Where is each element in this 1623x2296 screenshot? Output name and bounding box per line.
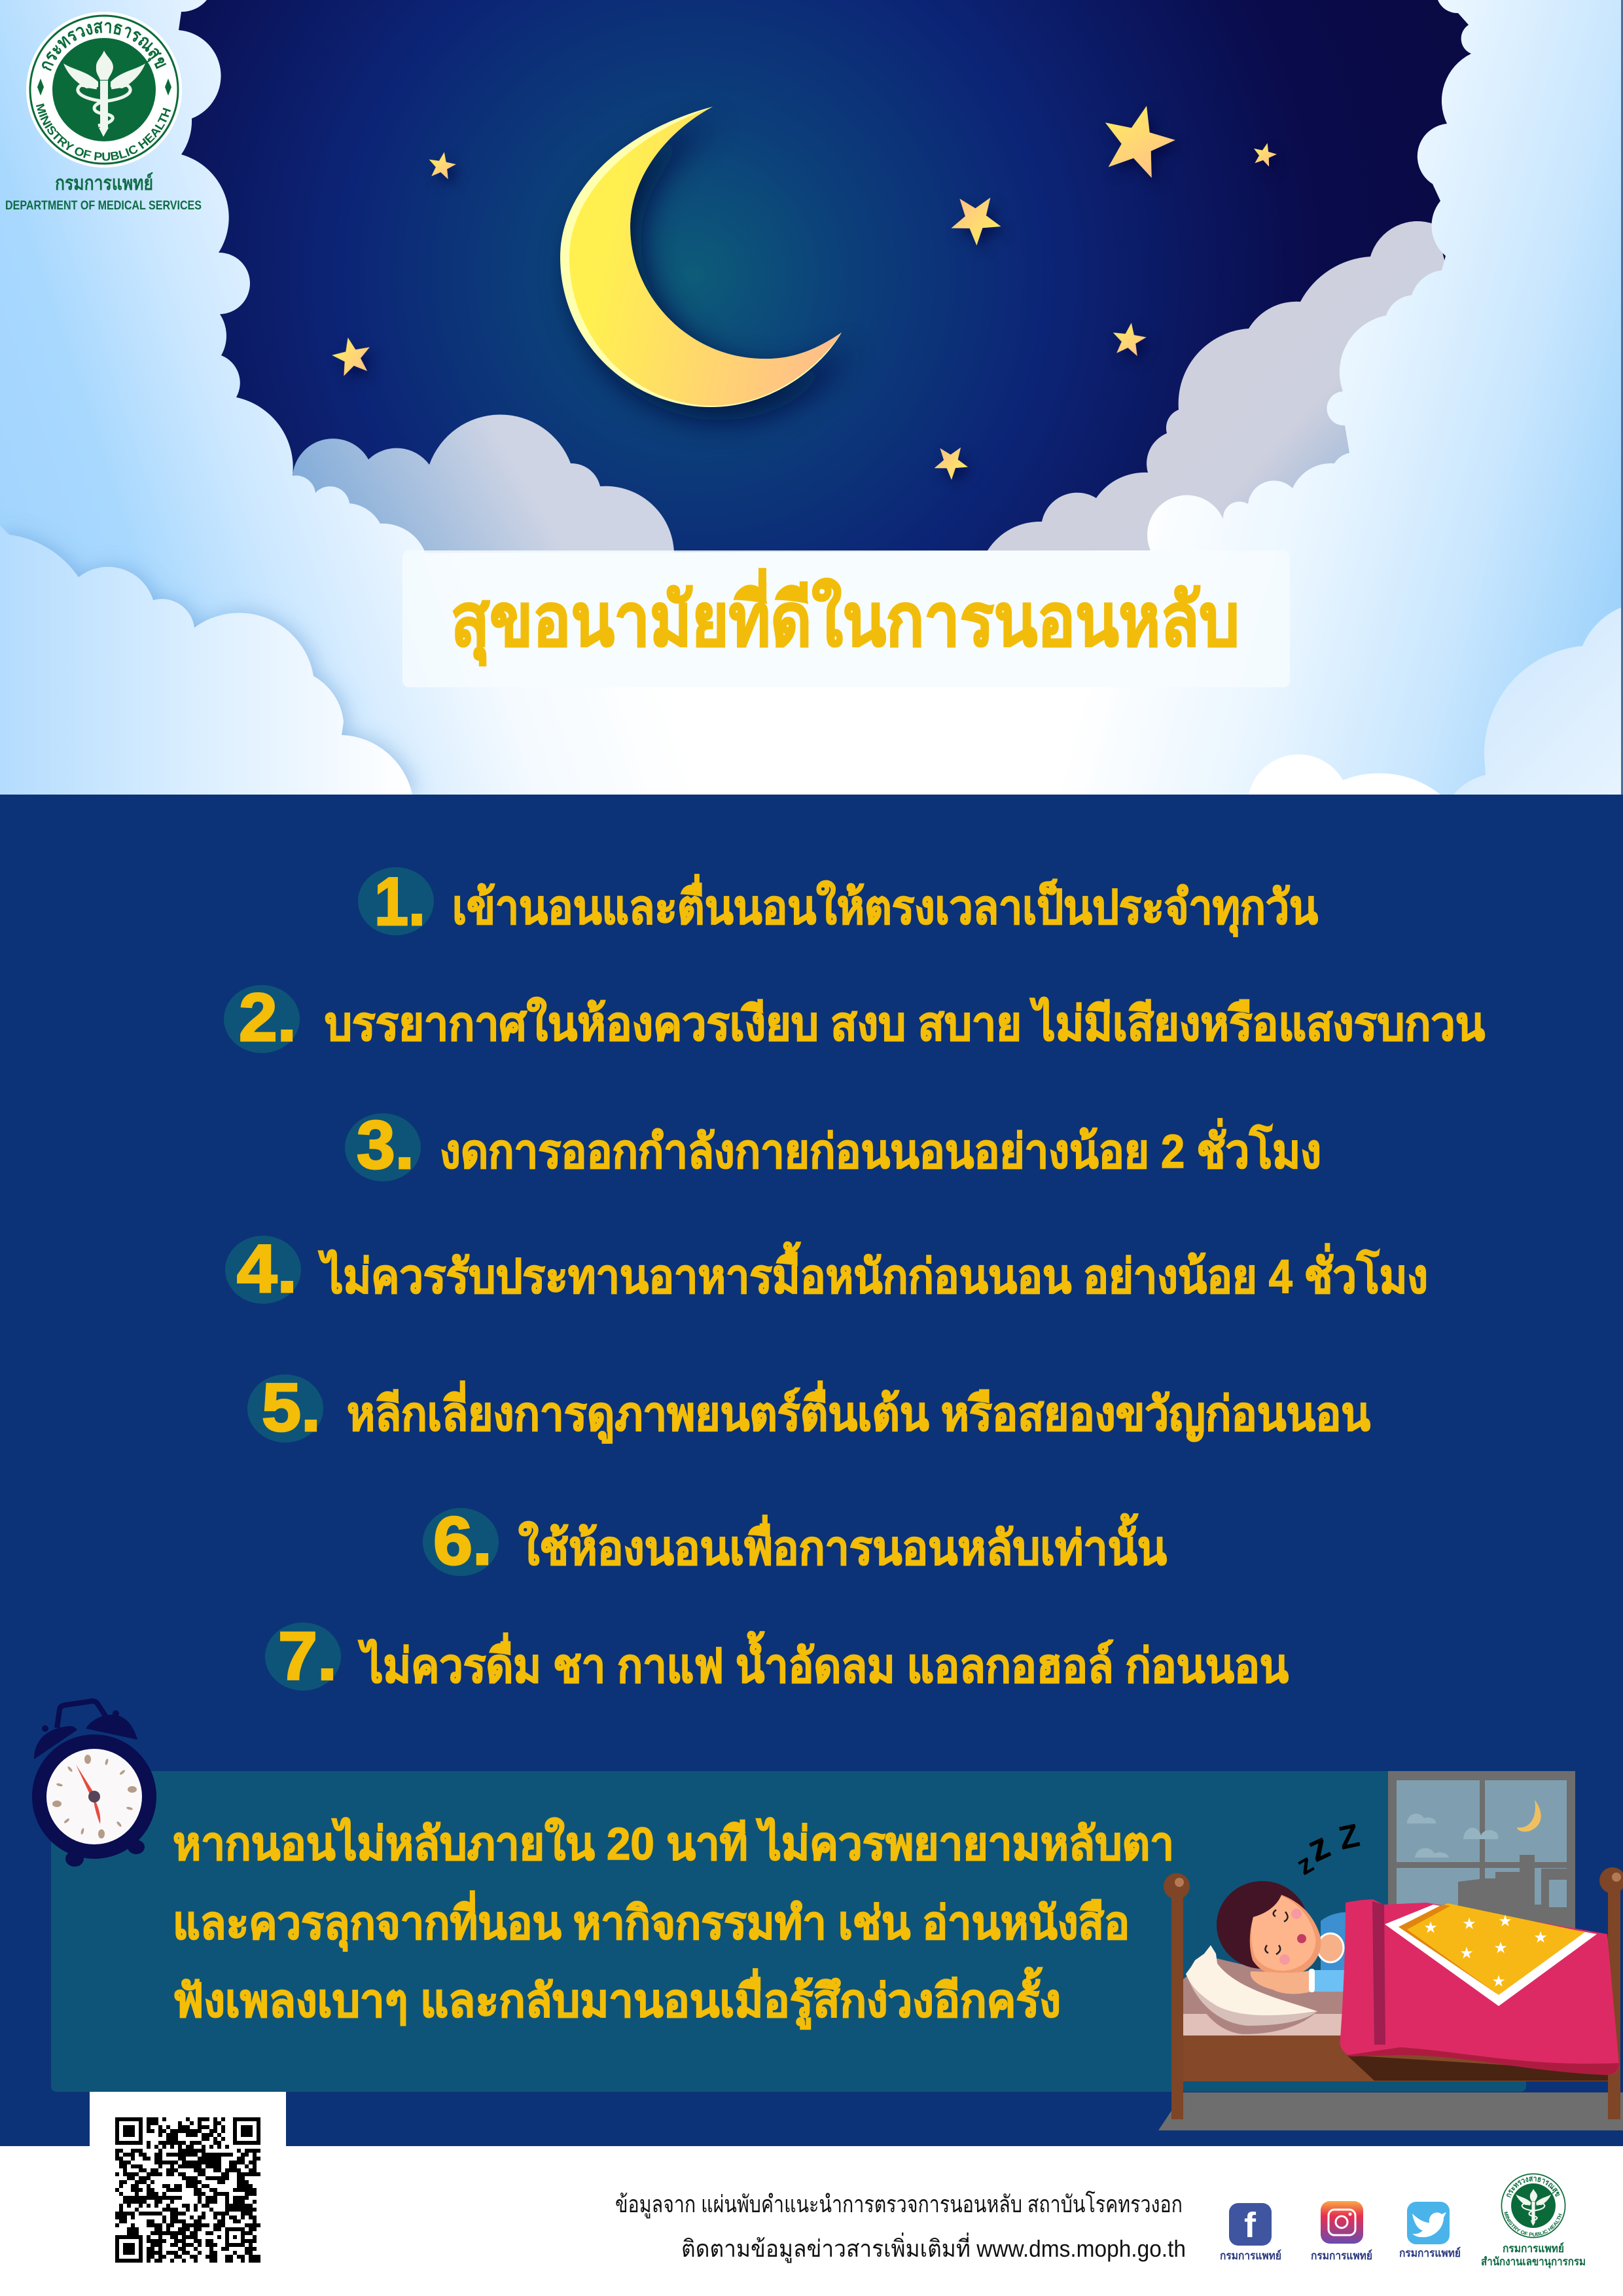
- blanket fold: [1385, 1905, 1597, 2006]
- icon: twitter: [1399, 2202, 1461, 2259]
- item 5: 5.: [262, 1370, 321, 1446]
- item 6: ใช้ห้องนอนเพื่อการนอนหลับเท่านั้น: [518, 1513, 1167, 1575]
- illustration: sleeping child in bed: ★: [1498, 1912, 1512, 1930]
- zzz: Z: [1336, 1817, 1363, 1857]
- item 3: 3.: [357, 1107, 414, 1183]
- item 6: [423, 1503, 1167, 1579]
- item 2: 2.: [239, 980, 296, 1056]
- cloud: left upper: [0, 0, 720, 795]
- illustration: sleeping child in bed: ★: [1423, 1918, 1438, 1937]
- panel: advice note: ฟังเพลงเบาๆ และกลับมานอนเมื่อรู้สึกง่วงอีกครั้ง: [173, 1967, 1061, 2030]
- item 6: 6.: [433, 1503, 492, 1579]
- panel: advice note: และควรลุกจากที่นอน หากิจกรรมทำ เช่น อ่านหนังสือ: [173, 1890, 1130, 1952]
- zzz: z: [1291, 1848, 1319, 1881]
- item 1: เข้านอนและตื่นนอนให้ตรงเวลาเป็นประจำทุกวัน: [452, 874, 1318, 937]
- item 7: [265, 1619, 1289, 1695]
- logo: ministry of public health: MINISTRY OF PUBLIC HEALTH: [36, 103, 171, 161]
- panel: advice note: [51, 1771, 1526, 2092]
- illustration: sleeping child in bed: ★: [1462, 1914, 1476, 1933]
- cloud: lower left front: [0, 526, 412, 795]
- illustration: sleeping child in bed: [1158, 1771, 1623, 2130]
- title: สุขอนามัยที่ดีในการนอนหลับ: [451, 568, 1240, 666]
- qr code: [90, 2092, 286, 2296]
- icon: instagram: กรมการแพทย์: [1311, 2249, 1372, 2262]
- cloud: small white bottom: [1249, 755, 1440, 795]
- icon: caduceus: [63, 50, 145, 137]
- cloud: lower right: [1454, 607, 1623, 795]
- blanket: [1340, 1899, 1619, 2075]
- item 4: [225, 1231, 1428, 1307]
- bed posts: [1171, 1896, 1183, 2119]
- department name: [5, 172, 202, 213]
- cloud: right: [402, 0, 1623, 795]
- item 7: ไม่ควรดื่ม ชา กาแฟ น้ำอัดลม แอลกอฮอล์ ก่อนนอน: [358, 1631, 1289, 1693]
- item 3: [345, 1107, 1321, 1183]
- illustration: sleeping child in bed: ★: [1533, 1928, 1548, 1946]
- logo: footer seal: [1481, 2173, 1586, 2269]
- icon: facebook: [1220, 2203, 1281, 2262]
- illustration: sleeping child in bed: ★: [1493, 1939, 1508, 1957]
- footer: source text: ข้อมูลจาก แผ่นพับคำแนะนำการตรวจการนอนหลับ สถาบันโรคทรวงอก: [615, 2191, 1183, 2219]
- icon: twitter: กรมการแพทย์: [1399, 2246, 1461, 2259]
- illustration: sleeping child in bed: ★: [1459, 1944, 1474, 1962]
- item 5: หลีกเลี่ยงการดูภาพยนตร์ตื่นเต้น หรือสยองขวัญก่อนนอน: [347, 1380, 1370, 1444]
- moon: [560, 107, 852, 420]
- item 4: 4.: [237, 1231, 297, 1307]
- panel: advice note: หากนอนไม่หลับภายใน 20 นาที ไม่ควรพยายามหลับตา: [173, 1817, 1174, 1869]
- illustration: sleeping child in bed: ★: [1491, 1972, 1506, 1990]
- department name: กรมการแพทย์: [55, 172, 153, 194]
- logo: ministry of public health: [26, 12, 182, 168]
- item 1: 1.: [374, 864, 425, 940]
- window: [1388, 1771, 1575, 1935]
- item 7: 7.: [278, 1619, 337, 1695]
- panel: night sky: [0, 0, 1623, 795]
- item 5: [247, 1370, 1370, 1446]
- item 1: [358, 864, 1318, 940]
- item 2: [224, 980, 1485, 1056]
- item 3: งดการออกกำลังกายก่อนนอนอย่างน้อย 2 ชั่วโมง: [440, 1118, 1321, 1178]
- logo: footer seal: MINISTRY OF PUBLIC HEALTH: [1504, 2212, 1562, 2236]
- logo: footer seal: กรมการแพทย์: [1503, 2242, 1564, 2255]
- department name: DEPARTMENT OF MEDICAL SERVICES: [5, 199, 202, 213]
- icon: alarm clock: [32, 1701, 156, 1867]
- icon: facebook: กรมการแพทย์: [1220, 2249, 1281, 2262]
- panel: navy content background: [0, 795, 1623, 2149]
- icon: instagram: [1311, 2201, 1372, 2262]
- floor: [1158, 2092, 1623, 2130]
- zzz: [1291, 1817, 1363, 1881]
- zzz: z: [1301, 1824, 1336, 1871]
- back cloud right: [988, 221, 1479, 563]
- bed base: [1176, 2035, 1609, 2081]
- item 4: ไม่ควรรับประทานอาหารมื้อหนักก่อนนอน อย่างน้อย 4 ชั่วโมง: [318, 1242, 1428, 1303]
- icon: facebook: f: [1244, 2206, 1257, 2245]
- pillow: [1186, 1945, 1317, 2034]
- item 2: บรรยากาศในห้องควรเงียบ สงบ สบาย ไม่มีเสียงหรือแสงรบกวน: [325, 996, 1485, 1050]
- back cloud left: [288, 414, 674, 556]
- mattress: [1183, 2014, 1347, 2036]
- title box: [402, 550, 1290, 687]
- logo: ministry of public health: กระทรวงสาธารณสุข: [42, 21, 166, 71]
- child: [1217, 1881, 1349, 1994]
- logo: footer seal: สำนักงานเลขานุการกรม: [1481, 2255, 1586, 2269]
- stars: [329, 97, 1279, 480]
- footer: white band: [0, 2146, 1623, 2296]
- logo: footer seal: กระทรวงสาธารณสุข: [1507, 2176, 1560, 2198]
- footer: website text: ติดตามข้อมูลข่าวสารเพิ่มเติมที่ www.dms.moph.go.th: [681, 2233, 1186, 2263]
